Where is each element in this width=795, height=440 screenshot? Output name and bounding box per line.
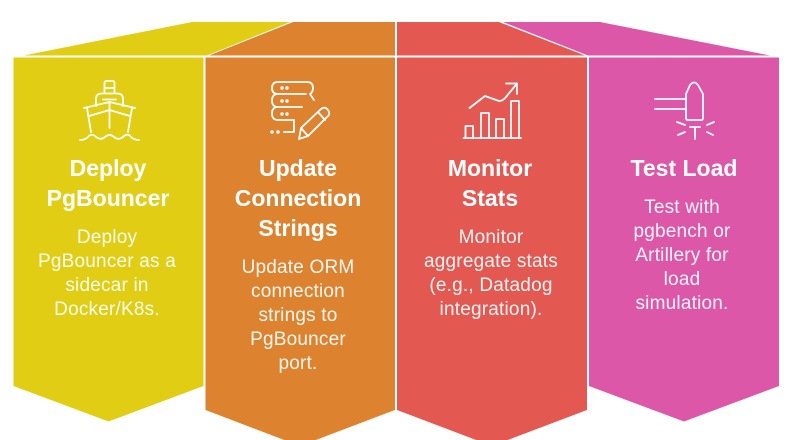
text: Deploy description: PgBouncer as a bbox=[38, 251, 176, 272]
text: Update description bbox=[242, 257, 354, 374]
text: Update description: connection bbox=[251, 281, 345, 302]
heading: Update Connection Strings: Strings bbox=[258, 215, 338, 241]
text: Update description: Update ORM bbox=[242, 257, 354, 278]
text: Update description: PgBouncer bbox=[250, 329, 346, 350]
heading: Test Load: Test Load bbox=[631, 155, 737, 181]
panel: red top flap bbox=[397, 22, 585, 56]
heading: Deploy PgBouncer: Deploy bbox=[70, 155, 146, 181]
heading: Monitor Stats: Monitor bbox=[448, 155, 532, 181]
panel: pink body bbox=[589, 58, 779, 422]
heading: Monitor Stats bbox=[448, 155, 532, 211]
text: Deploy description: sidecar in bbox=[65, 275, 149, 296]
text: Monitor description: Monitor bbox=[459, 227, 523, 248]
panel: yellow body bbox=[14, 58, 204, 422]
panel: red body bbox=[397, 58, 587, 440]
text: Test description: Test with bbox=[644, 197, 720, 218]
text: Test description: Artillery for bbox=[635, 245, 729, 266]
heading: Monitor Stats: Stats bbox=[462, 185, 518, 211]
icon: launch test projectile bbox=[655, 82, 714, 139]
text: Test description bbox=[633, 197, 731, 314]
text: Deploy description: Deploy bbox=[77, 227, 137, 248]
heading: Update Connection Strings bbox=[235, 155, 361, 241]
icon: rising bar chart bbox=[464, 84, 521, 138]
text: Test description: pgbench or bbox=[633, 221, 731, 242]
panel: orange top flap bbox=[209, 22, 395, 56]
panel: yellow top flap bbox=[24, 22, 290, 56]
panel: pink top flap bbox=[503, 22, 770, 56]
text: Monitor description: integration). bbox=[440, 299, 542, 320]
text: Monitor description: (e.g., Datadog bbox=[429, 275, 553, 296]
text: Test description: load bbox=[664, 269, 700, 290]
text: Update description: strings to bbox=[258, 305, 338, 326]
text: Monitor description bbox=[424, 227, 558, 320]
heading: Update Connection Strings: Connection bbox=[235, 185, 361, 211]
text: Deploy description: Docker/K8s. bbox=[54, 299, 160, 320]
text: Deploy description bbox=[38, 227, 176, 320]
text: Monitor description: aggregate stats bbox=[424, 251, 558, 272]
text: Update description: port. bbox=[278, 353, 318, 374]
icon: ship bbox=[80, 81, 139, 140]
text: Test description: simulation. bbox=[635, 293, 729, 314]
heading: Deploy PgBouncer: PgBouncer bbox=[47, 185, 169, 211]
heading: Deploy PgBouncer bbox=[47, 155, 169, 211]
heading: Update Connection Strings: Update bbox=[259, 155, 337, 181]
icon: database with pencil bbox=[271, 82, 329, 139]
panel: orange body bbox=[206, 58, 395, 440]
